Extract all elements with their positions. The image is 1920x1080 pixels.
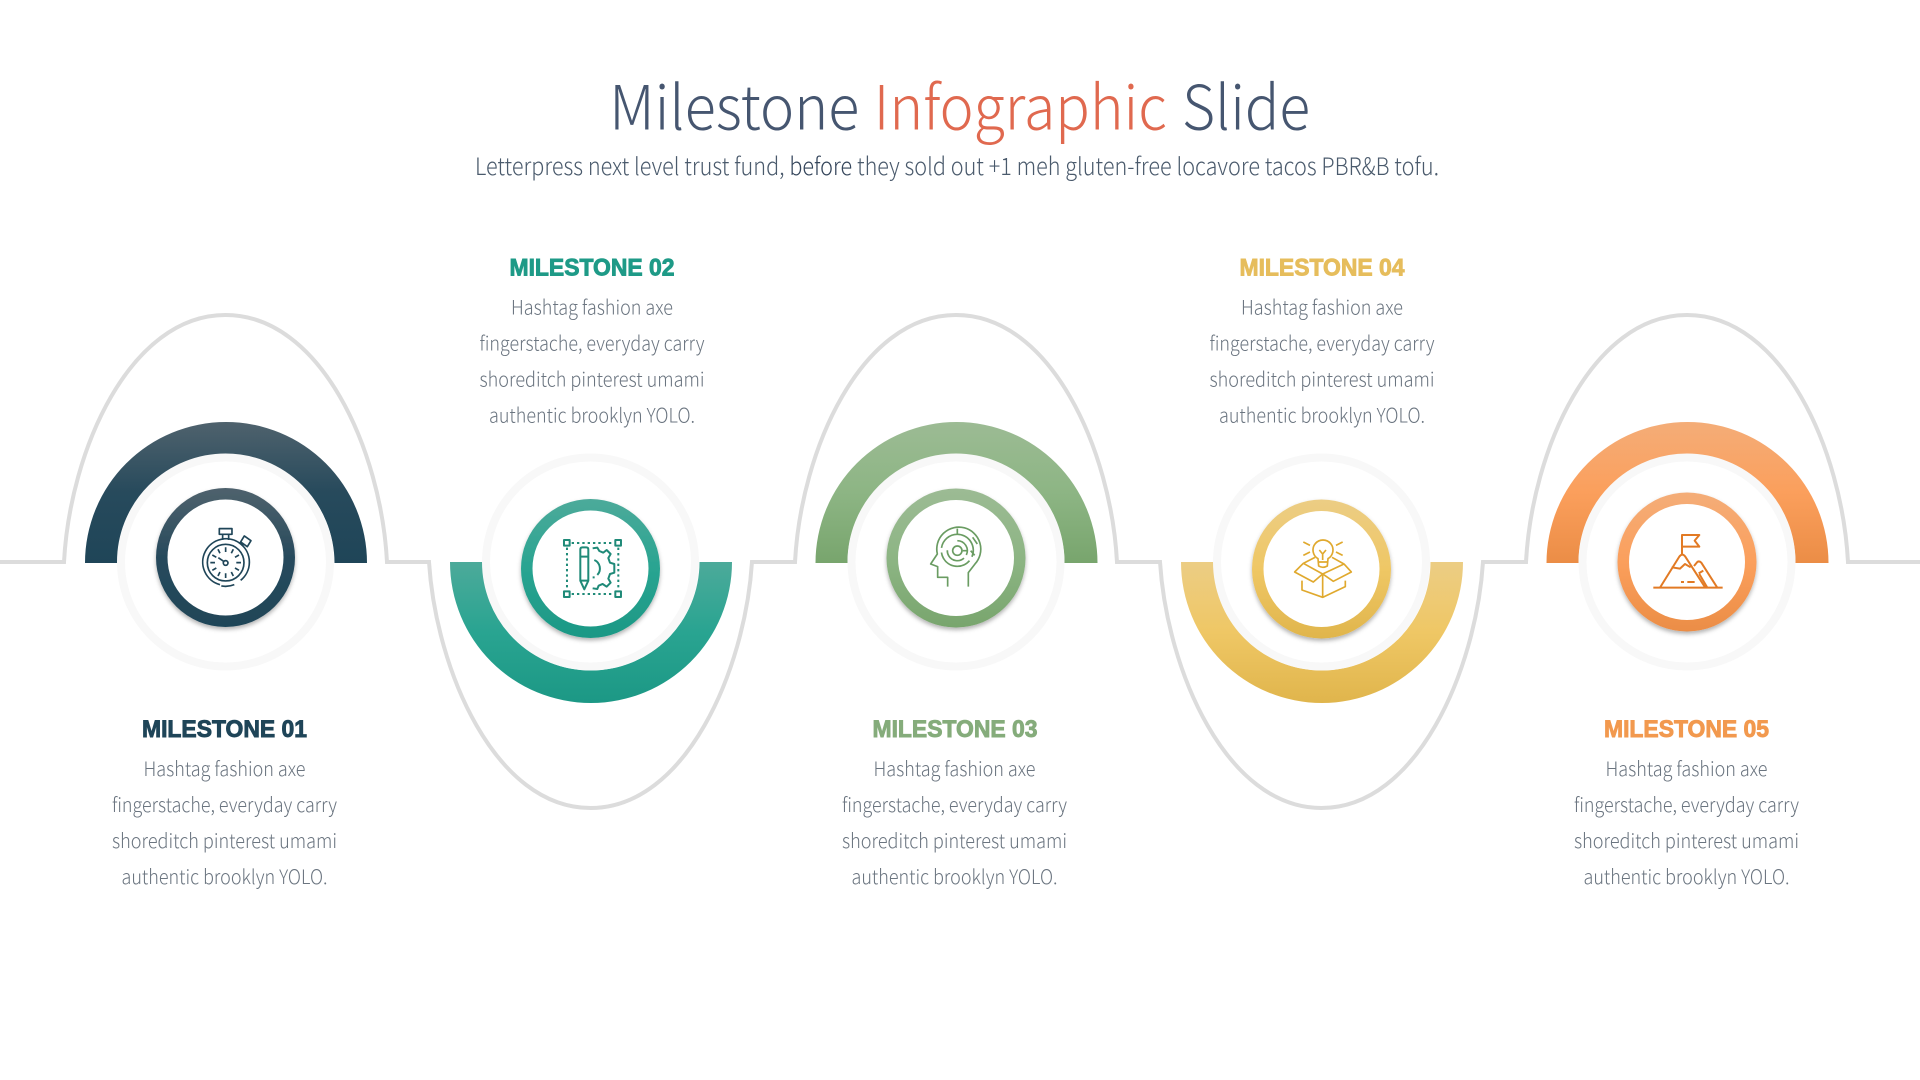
faint ring (121, 458, 330, 666)
heading: MILESTONE 05 (1604, 716, 1769, 743)
title: Infographic (874, 58, 1167, 148)
description (1574, 753, 1799, 890)
faint ring (1582, 458, 1792, 666)
description: shoreditch pinterest umami (112, 825, 337, 854)
description (1210, 291, 1435, 428)
title: Slide (1182, 58, 1310, 148)
description: authentic brooklyn YOLO. (489, 399, 695, 428)
heading: MILESTONE 03 (872, 716, 1038, 743)
panel: milestone 02 (450, 254, 732, 703)
description (480, 291, 705, 428)
icon badge ring (156, 488, 295, 627)
badge inner circle (168, 500, 284, 616)
description (842, 753, 1067, 890)
description: fingerstache, everyday carry (1574, 789, 1799, 818)
badge inner circle (1629, 504, 1745, 620)
description: Hashtag fashion axe (874, 753, 1036, 782)
heading: MILESTONE 04 (1240, 254, 1405, 281)
icon badge ring (1618, 492, 1756, 632)
icon: stopwatch (203, 529, 251, 586)
bottom arc band (1181, 562, 1463, 703)
wavy connector line (0, 315, 1920, 808)
description: fingerstache, everyday carry (842, 789, 1067, 818)
description (112, 753, 337, 890)
icon badge ring (1252, 500, 1391, 638)
description: fingerstache, everyday carry (1210, 327, 1435, 356)
icon badge ring (521, 499, 660, 638)
description: Hashtag fashion axe (1241, 291, 1403, 320)
description: shoreditch pinterest umami (1574, 825, 1799, 854)
description: shoreditch pinterest umami (842, 825, 1067, 854)
icon: head with maze (931, 527, 981, 587)
description: fingerstache, everyday carry (112, 789, 337, 818)
description: authentic brooklyn YOLO. (1584, 861, 1790, 890)
panel: milestone 04 (1181, 254, 1463, 703)
icon: design pencil and gear (564, 540, 621, 597)
faint ring (852, 458, 1060, 666)
panel: milestone 05 (1546, 422, 1828, 890)
badge inner circle (1264, 511, 1380, 627)
description: Hashtag fashion axe (511, 291, 673, 320)
title (609, 58, 1310, 148)
panel: milestone 03 (816, 422, 1098, 890)
faint ring (1217, 458, 1426, 666)
badge inner circle (532, 510, 648, 626)
subtitle: Letterpress next level trust fund, before they sold out +1 meh gluten-free locavore tacos PBR&B tofu. (475, 147, 1439, 182)
heading: MILESTONE 01 (142, 716, 307, 743)
description: authentic brooklyn YOLO. (852, 861, 1058, 890)
panel: milestone 01 (85, 422, 367, 890)
top arc band (1546, 422, 1828, 563)
top arc band (816, 422, 1098, 563)
title: Milestone (609, 58, 859, 148)
description: authentic brooklyn YOLO. (122, 861, 328, 890)
heading: MILESTONE 02 (510, 254, 674, 281)
description: shoreditch pinterest umami (1210, 363, 1434, 392)
description: fingerstache, everyday carry (480, 327, 705, 356)
description: authentic brooklyn YOLO. (1219, 399, 1425, 428)
badge inner circle (898, 500, 1014, 616)
icon: mountain flag (1653, 535, 1723, 588)
bottom arc band (450, 562, 732, 703)
description: Hashtag fashion axe (144, 753, 306, 782)
icon: idea box (1295, 540, 1351, 597)
description: shoreditch pinterest umami (480, 363, 704, 392)
description: Hashtag fashion axe (1606, 753, 1768, 782)
faint ring (486, 458, 695, 666)
icon badge ring (886, 488, 1026, 628)
top arc band (85, 422, 367, 563)
